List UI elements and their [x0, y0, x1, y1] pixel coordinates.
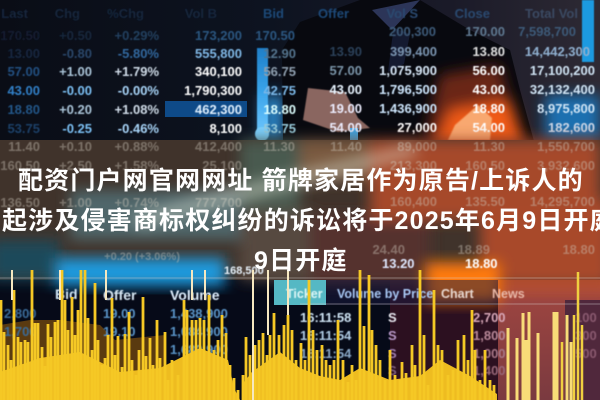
- faded table rows behind the band: +2.50: [59, 158, 92, 173]
- data table: stock quotes: 56.75: [263, 64, 296, 79]
- data table: stock quotes: Vol B: [185, 6, 217, 21]
- data table: stock quotes: +1.00: [59, 64, 92, 79]
- faded table rows behind the band: 213,300: [390, 158, 437, 173]
- faded table rows behind the band: 3,932,600: [537, 158, 595, 173]
- headline line 3: 9日开庭: [254, 247, 348, 275]
- data table: stock quotes: 1,790,300: [184, 83, 242, 98]
- icon: businessman silhouette: [282, 0, 535, 165]
- tab row: Ticker, Volume by Price, Chart, News: 16:11:54: [300, 328, 352, 343]
- data table: stock quotes: 8,975,800: [537, 101, 595, 116]
- data table: stock quotes: +1.79%: [115, 64, 159, 79]
- tab row: Ticker, Volume by Price, Chart, News: 1,400: [473, 363, 506, 378]
- faded table rows behind the band: 160.50: [465, 158, 505, 173]
- data table: stock quotes: 1,075,900: [379, 63, 437, 78]
- lower table: Bid: [55, 286, 78, 302]
- data table: stock quotes: -5.80%: [118, 46, 159, 61]
- data table: stock quotes: [0, 6, 595, 136]
- tab row: Ticker, Volume by Price, Chart, News: 2,700: [473, 310, 506, 325]
- faded table rows behind the band: 160.50: [0, 158, 40, 173]
- faded table rows behind the band: 135.50: [465, 194, 505, 209]
- faded table rows behind the band: 11.30: [473, 139, 505, 154]
- lower table: 1,680,900: [170, 342, 228, 357]
- data table: stock quotes: 182,600: [548, 120, 595, 135]
- glow: blue screen: [55, 258, 225, 286]
- faded table rows behind the band: 412,400: [195, 139, 242, 154]
- faded table rows behind the band: 136.50: [0, 195, 40, 210]
- faded table rows behind the band: 25,100: [202, 158, 242, 173]
- lower table: 19.00: [103, 306, 136, 321]
- faded table rows behind the band: 14,295,700: [530, 194, 595, 209]
- data table: stock quotes: 42.75: [263, 83, 296, 98]
- data table: stock quotes: 13.80: [472, 44, 505, 59]
- data table: stock quotes: 18.80: [472, 101, 505, 116]
- data table: stock quotes: 18.80: [7, 102, 40, 117]
- data table: stock quotes: +0.50: [59, 28, 92, 43]
- data table: stock quotes: 53.75: [7, 121, 40, 136]
- data table: stock quotes: 12.90: [263, 46, 296, 61]
- lower table: [4, 256, 498, 375]
- data table: stock quotes: -0.25: [62, 121, 92, 136]
- tab row: Ticker, Volume by Price, Chart, News: 1,800: [473, 328, 506, 343]
- data table: stock quotes: 43.00: [329, 82, 362, 97]
- lower table: 18.80: [465, 256, 498, 271]
- data table: stock quotes: 54.00: [472, 120, 505, 135]
- data table: stock quotes: 555,800: [195, 46, 242, 61]
- tab row: Ticker, Volume by Price, Chart, News: 500: [575, 346, 597, 361]
- data table: stock quotes: 53.75: [263, 121, 296, 136]
- data table: stock quotes: 173,200: [195, 28, 242, 43]
- data table: stock quotes: +0.29%: [115, 28, 159, 43]
- bar chart: golden volume bars: [0, 270, 582, 400]
- faded table rows behind the band: [0, 139, 595, 263]
- data table: stock quotes: 19.00: [329, 101, 362, 116]
- data table: stock quotes: Close: [455, 6, 490, 21]
- hand highlight: [448, 105, 492, 140]
- faded table rows behind the band: 24.40: [372, 242, 405, 257]
- data table: stock quotes: 1,796,500: [379, 82, 437, 97]
- data table: stock quotes: 7,598,700: [518, 24, 576, 39]
- lower table: Volume: [170, 287, 220, 303]
- title band: tinted photo colours: [0, 140, 600, 302]
- highlighted row: [165, 101, 247, 117]
- data table: stock quotes: 57.00: [329, 63, 362, 78]
- tab row: Ticker, Volume by Price, Chart, News: Volume by Price: [337, 287, 433, 301]
- faded table rows behind the band: 18.80: [562, 242, 595, 257]
- decorative light columns: [255, 0, 594, 141]
- data table: stock quotes: 43.00: [7, 83, 40, 98]
- data table: stock quotes: Total Vol: [525, 6, 578, 21]
- headline line 1: 配资门户网官网网址 箭牌家居作为原告/上诉人的: [18, 167, 584, 195]
- data table: stock quotes: 18.80: [263, 102, 296, 117]
- data table: stock quotes: 32,132,400: [530, 82, 595, 97]
- data table: stock quotes: +0.20: [59, 102, 92, 117]
- tab row: Ticker, Volume by Price, Chart, News: Ticker: [286, 287, 323, 301]
- tab row: Ticker, Volume by Price, Chart, News: News: [492, 287, 525, 301]
- lower table: 19.10: [103, 324, 136, 339]
- data table: stock quotes: 462,300: [195, 102, 242, 117]
- faded table rows behind the band: +0.74%: [115, 195, 159, 210]
- data table: stock quotes: 170.50: [255, 28, 295, 43]
- data table: stock quotes: Vol S: [386, 6, 418, 21]
- data table: stock quotes: 54.00: [329, 120, 362, 135]
- data table: stock quotes: 27,000: [397, 120, 437, 135]
- glow: blue lights upper area: [262, 95, 600, 140]
- tab row: Ticker, Volume by Price, Chart, News: 16:11:54: [300, 346, 352, 361]
- lower table: 1,084,900: [170, 324, 228, 339]
- tab row: Ticker, Volume by Price, Chart, News: Chart: [441, 287, 474, 301]
- data table: stock quotes: 170.00: [465, 24, 505, 39]
- data table: stock quotes: %Chg: [107, 6, 144, 21]
- tab row: Ticker, Volume by Price, Chart, News: [0, 278, 600, 378]
- data table: stock quotes: -0.46%: [118, 121, 159, 136]
- tab row: Ticker, Volume by Price, Chart, News: S: [388, 310, 397, 325]
- data table: stock quotes: -0.00%: [118, 83, 159, 98]
- data table: stock quotes: 340,100: [195, 64, 242, 79]
- lower table: 168,500: [224, 265, 264, 277]
- faded table rows behind the band: 11.30: [263, 139, 295, 154]
- lower table: 2,800: [4, 306, 37, 321]
- faded table rows behind the band: 777,700: [195, 195, 242, 210]
- tab row: Ticker, Volume by Price, Chart, News: 300: [575, 328, 597, 343]
- data table: stock quotes: Chg: [55, 6, 80, 21]
- faded table rows behind the band: 1,550,700: [537, 139, 595, 154]
- data table: stock quotes: Bid: [263, 6, 284, 21]
- faded table rows behind the band: +1.58%: [115, 158, 159, 173]
- data table: stock quotes: Last: [1, 6, 29, 21]
- tab row: Ticker, Volume by Price, Chart, News: 1,000: [473, 346, 506, 361]
- glow: orange hand: [425, 262, 500, 302]
- glow: orange light on the suit: [425, 65, 525, 145]
- data table: stock quotes: 17,100,200: [530, 63, 595, 78]
- data table: stock quotes: +1.08%: [115, 102, 159, 117]
- lower table: 13.20: [382, 256, 415, 271]
- tab row: Ticker, Volume by Price, Chart, News: 16:11:58: [300, 310, 351, 325]
- data table: stock quotes: -0.80: [62, 46, 92, 61]
- faded table rows behind the band: 160,400: [390, 194, 437, 209]
- data table: stock quotes: 56.00: [472, 63, 505, 78]
- faded table rows behind the band: +0.20 (+3.06%): [104, 251, 180, 263]
- faded table rows behind the band: +0.88%: [115, 139, 159, 154]
- data table: stock quotes: 13.90: [329, 44, 362, 59]
- lower table: 1,438,900: [170, 306, 228, 321]
- light streak: [130, 145, 420, 228]
- data table: stock quotes: 399,400: [390, 44, 437, 59]
- lower background: [0, 280, 600, 400]
- faded table rows behind the band: +0.10: [59, 139, 92, 154]
- lower table: Offer: [103, 287, 137, 303]
- faded table rows behind the band: 11.40: [330, 139, 362, 154]
- brown shadow behind bars: [0, 320, 165, 400]
- lower table: 1,700: [4, 324, 37, 339]
- data table: stock quotes: Offer: [318, 6, 349, 21]
- tab row: Ticker, Volume by Price, Chart, News: 100: [575, 310, 597, 325]
- data table: stock quotes: 170.50: [0, 28, 40, 43]
- tab row: Ticker, Volume by Price, Chart, News: S: [388, 363, 397, 378]
- tab row: Ticker, Volume by Price, Chart, News: S: [388, 328, 397, 343]
- faded table rows behind the band: 18.89: [457, 242, 490, 257]
- data table: stock quotes: 1,436,900: [379, 101, 437, 116]
- data table: stock quotes: 43.00: [472, 82, 505, 97]
- data table: stock quotes: 200,300: [389, 24, 436, 39]
- data table: stock quotes: 57.00: [7, 64, 40, 79]
- headline line 2: 起涉及侵害商标权纠纷的诉讼将于2025年6月9日开庭: [2, 207, 600, 235]
- data table: stock quotes: 14,442,300: [525, 44, 590, 59]
- faded table rows behind the band: 89,000: [397, 139, 437, 154]
- faded table rows behind the band: +1.00: [59, 195, 92, 210]
- tab row: Ticker, Volume by Price, Chart, News: S: [388, 346, 397, 361]
- data table: stock quotes: 13.00: [7, 46, 40, 61]
- data table: stock quotes: 8,100: [209, 121, 242, 136]
- data table: stock quotes: -0.00: [62, 83, 92, 98]
- lower table: 1,403,900: [170, 360, 228, 375]
- faded table rows behind the band: 11.40: [8, 139, 40, 154]
